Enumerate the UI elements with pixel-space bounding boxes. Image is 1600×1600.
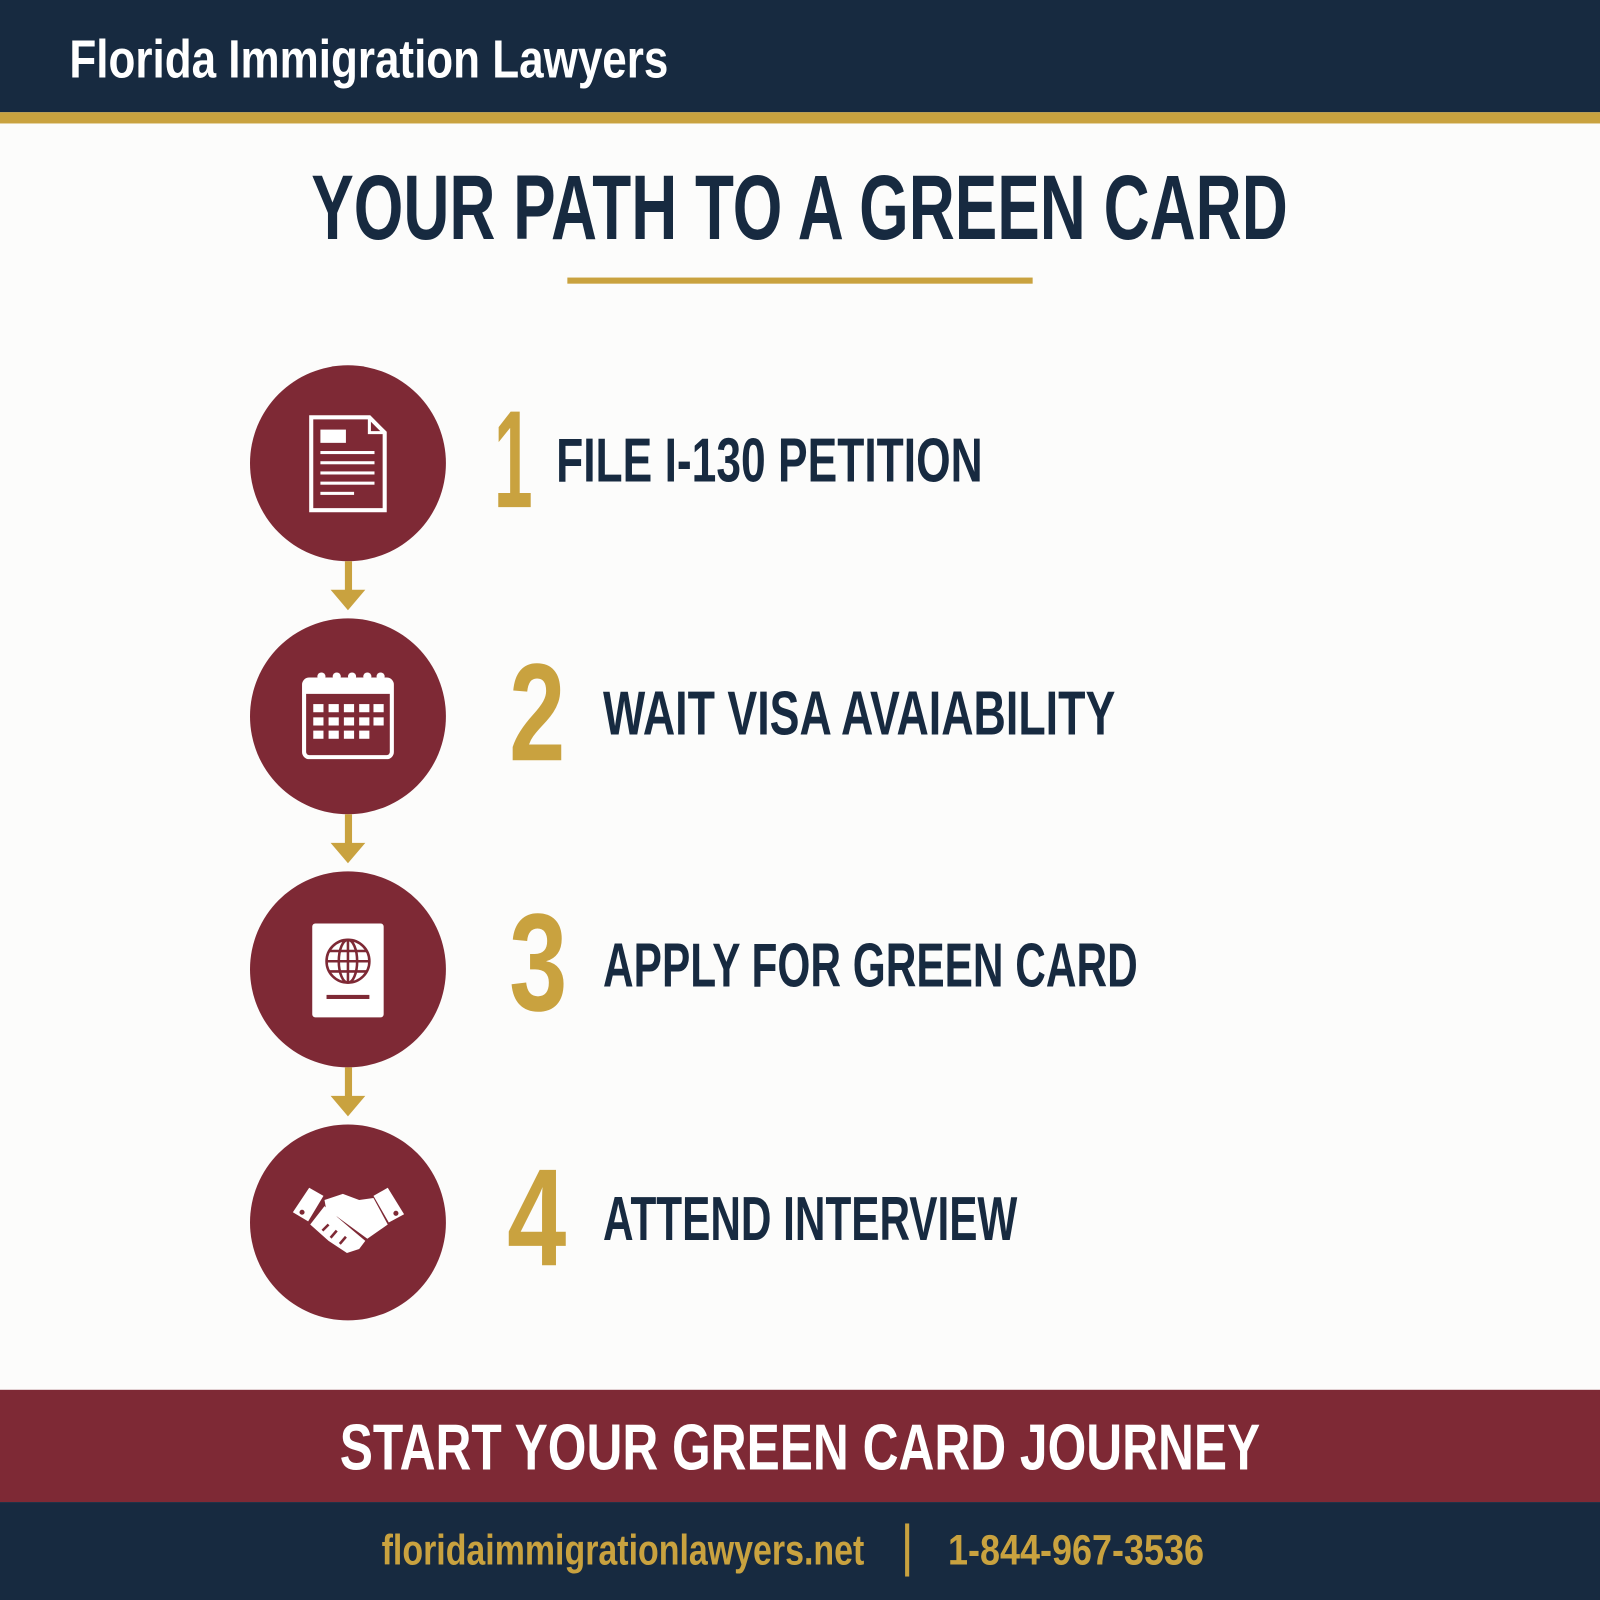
icon: handshake <box>250 1124 446 1320</box>
arrow 2 <box>331 814 365 863</box>
step number 4: 4 <box>507 1140 566 1295</box>
step 1 <box>250 365 983 561</box>
footer: contact <box>0 1502 1600 1600</box>
step text 4: ATTEND INTERVIEW <box>603 1185 1018 1254</box>
step 4 <box>250 1124 1018 1320</box>
header text: Florida Immigration Lawyers <box>69 30 668 90</box>
step 2 <box>250 618 1115 814</box>
icon: passport <box>250 871 446 1067</box>
website: floridaimmigrationlawyers.net <box>382 1526 864 1574</box>
icon: document <box>250 365 446 561</box>
step text 1: FILE I-130 PETITION <box>556 427 983 496</box>
banner: call to action: START YOUR GREEN CARD JOURNEY <box>340 1410 1260 1483</box>
step number 2: 2 <box>509 635 565 790</box>
step 3 <box>250 871 1138 1067</box>
step number 3: 3 <box>509 885 567 1040</box>
phone: 1-844-967-3536 <box>948 1526 1204 1574</box>
step number 1: 1 <box>494 382 533 537</box>
title underline <box>567 278 1033 284</box>
step text 3: APPLY FOR GREEN CARD <box>603 932 1138 1001</box>
arrow 3 <box>331 1067 365 1116</box>
header bar <box>0 0 1600 123</box>
banner: call to action <box>0 1390 1600 1502</box>
step text 2: WAIT VISA AVAIABILITY <box>603 680 1115 749</box>
icon: calendar <box>250 618 446 814</box>
arrow 1 <box>331 561 365 610</box>
